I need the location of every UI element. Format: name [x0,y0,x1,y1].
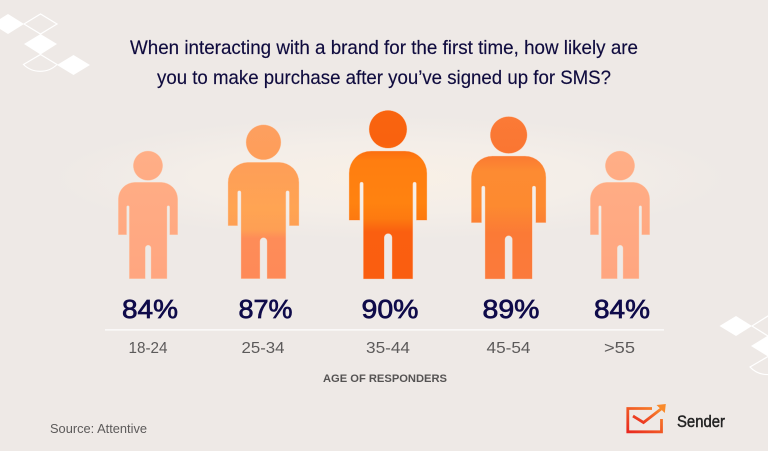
age labels: 18-24 [128,340,168,357]
percentages: 87% [238,294,292,324]
divider line [105,329,664,330]
age labels: 25-34 [242,340,285,357]
decorative diamonds: right edge [720,316,768,375]
figure: age 45-54 [471,116,546,279]
percentages: 89% [482,294,540,324]
percentages: 84% [594,294,650,324]
wordmark: Sender [677,413,725,431]
percentages [122,294,650,324]
decorative diamonds: top left [0,14,90,75]
logo: Sender [628,404,725,432]
axis label: AGE OF RESPONDERS [323,373,447,385]
age labels: 45-54 [486,340,531,357]
figure: age over 55 [590,151,650,279]
title: you to make purchase after you’ve signed up for SMS? [157,67,611,89]
percentages: 90% [362,294,418,324]
figure: age 18-24 [118,151,178,279]
age labels: >55 [604,340,635,357]
age labels: 35-44 [366,340,410,357]
figure: age 25-34 [228,125,299,279]
source: Source: Attentive [50,421,147,436]
title: When interacting with a brand for the first time, how likely are [130,37,638,59]
icon: envelope with arrow [628,404,666,432]
age labels [128,340,635,357]
figure: age 35-44 [349,110,427,279]
title [130,37,638,89]
percentages: 84% [122,294,178,324]
